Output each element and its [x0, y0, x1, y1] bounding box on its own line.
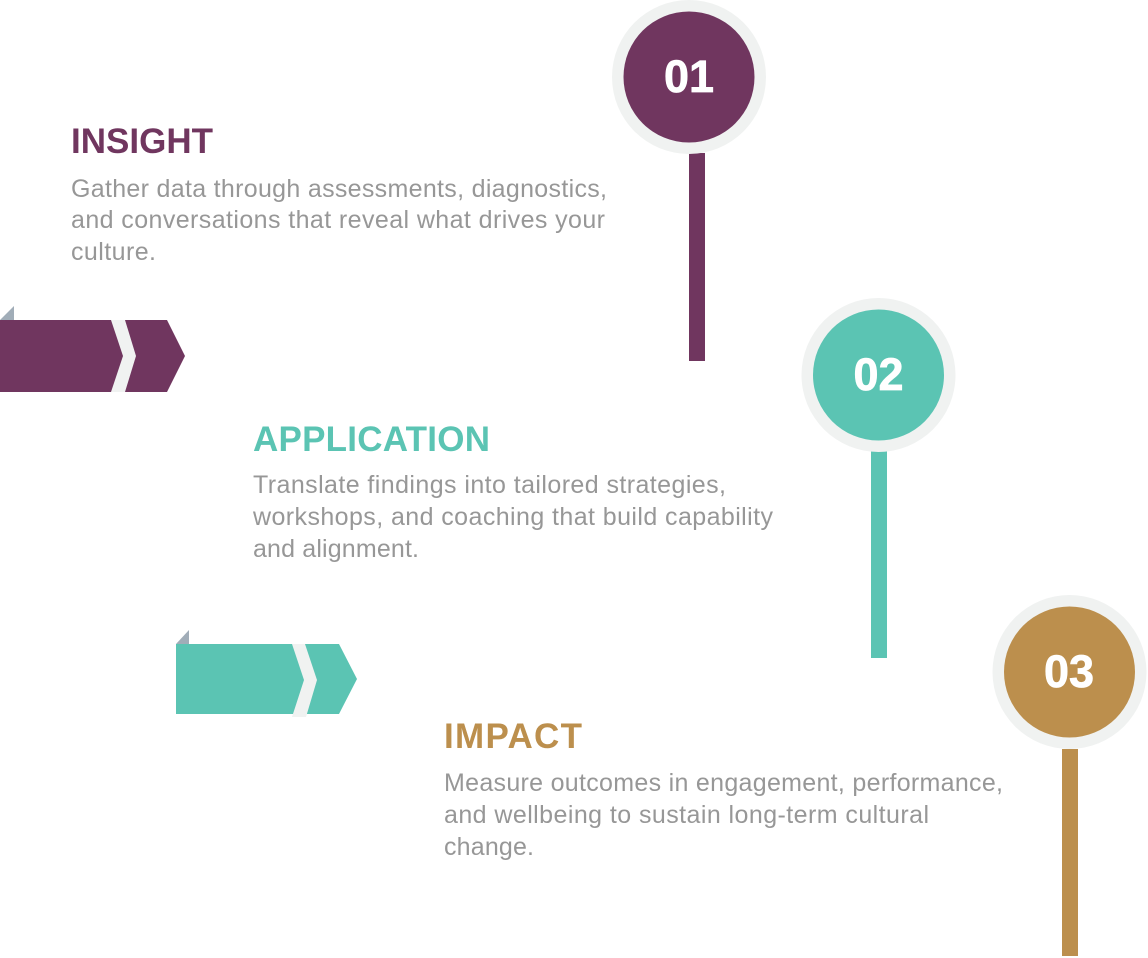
number badge 01: [612, 0, 766, 154]
text: insight description: [71, 175, 607, 266]
text: application description: [252, 471, 774, 563]
step 1: insight: [0, 0, 766, 392]
text: application description: workshops, and coaching that build capability: [252, 503, 774, 531]
step 2: application: [176, 298, 956, 717]
heading: insight: INSIGHT: [71, 122, 213, 161]
text: impact description: Measure outcomes in engagement, performance,: [444, 769, 1003, 797]
text: impact description: change.: [444, 833, 534, 861]
heading: application: APPLICATION: [253, 420, 490, 459]
number badge 02: 02: [853, 349, 904, 400]
number badge 03: [992, 595, 1146, 749]
heading: impact: IMPACT: [444, 717, 582, 756]
text: application description: and alignment.: [253, 535, 419, 563]
text: insight description: culture.: [71, 238, 156, 266]
stem 3: [1062, 749, 1078, 956]
text: insight description: and conversations that reveal what drives your: [71, 206, 605, 234]
step 3: impact: [444, 595, 1146, 956]
stem 1: [689, 153, 705, 361]
number badge 03: 03: [1044, 646, 1094, 697]
text: impact description: and wellbeing to sustain long-term cultural: [444, 801, 929, 829]
text: impact description: [444, 769, 1003, 861]
arrow 2: [176, 630, 357, 717]
number badge 01: 01: [664, 51, 714, 102]
arrow 1: [0, 306, 185, 392]
text: insight description: Gather data through assessments, diagnostics,: [71, 175, 607, 203]
text: application description: Translate findings into tailored strategies,: [253, 471, 726, 499]
number badge 02: [802, 298, 956, 452]
stem 2: [871, 451, 887, 658]
